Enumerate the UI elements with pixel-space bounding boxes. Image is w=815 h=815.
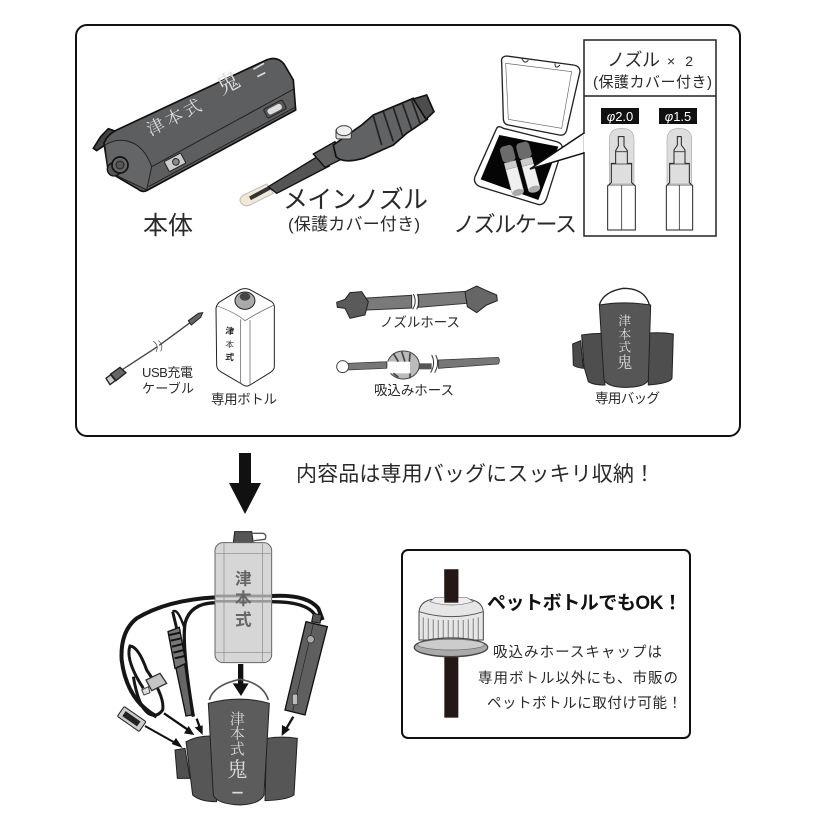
hose cap bbox=[142, 673, 167, 695]
icon: main unit: 津本式 bbox=[142, 90, 208, 140]
bottle: 津 bbox=[235, 570, 252, 589]
icon: suction hose bbox=[337, 351, 499, 379]
text: nozzle quantity: × 2 bbox=[667, 53, 693, 69]
icon: dedicated bag: 本 bbox=[618, 323, 631, 342]
label: main unit: 本体 bbox=[143, 212, 193, 240]
bottle: 本 bbox=[235, 590, 252, 609]
icon: main unit bbox=[93, 58, 296, 191]
label: diameter 2.0: φ2.0 bbox=[607, 109, 633, 124]
bag bbox=[175, 679, 297, 805]
bag: 本 bbox=[230, 723, 245, 744]
bag: 鬼 bbox=[227, 753, 248, 783]
label: nozzle hose: ノズルホース bbox=[380, 315, 460, 330]
icon: dedicated bottle: 式 bbox=[225, 350, 235, 363]
icon: dedicated bag: 津 bbox=[618, 310, 631, 329]
label: main nozzle cover note: (保護カバー付き) bbox=[288, 215, 420, 234]
illustration: items stored in bag bbox=[117, 532, 327, 805]
label: main nozzle: メインノズル bbox=[283, 186, 428, 214]
bottle: 式 bbox=[235, 610, 252, 629]
text: description bbox=[478, 644, 682, 712]
icon: nozzle hose bbox=[337, 286, 497, 318]
icon: dedicated bag: 鬼 bbox=[617, 350, 632, 372]
label: USB cable bbox=[142, 365, 194, 396]
text: description: ペットボトルに取付け可能！ bbox=[487, 695, 682, 712]
bottle bbox=[215, 532, 272, 663]
usb cable case bbox=[117, 706, 146, 732]
icon: dedicated bag bbox=[573, 288, 673, 387]
icon: main unit: 鬼 bbox=[210, 62, 245, 101]
arrows into bag bbox=[145, 664, 293, 743]
label: diameter 1.5: φ1.5 bbox=[665, 109, 691, 124]
icon: dedicated bottle: 津 bbox=[225, 324, 235, 337]
panel: package contents bbox=[76, 25, 740, 436]
icon: dedicated bottle: 本 bbox=[225, 338, 235, 350]
nozzle bbox=[168, 612, 192, 716]
bag: 式 bbox=[230, 738, 245, 759]
icon: suction hose cap bbox=[414, 569, 488, 718]
icon: main nozzle bbox=[240, 95, 434, 206]
icon: nozzle 1.5 bbox=[666, 128, 693, 230]
main unit bbox=[285, 613, 327, 715]
arrow: big down arrow bbox=[229, 453, 261, 514]
label: dedicated bottle: 専用ボトル bbox=[211, 392, 277, 407]
label: USB cable: ケーブル bbox=[142, 381, 194, 396]
text: description: 専用ボトル以外にも、市販の bbox=[478, 670, 678, 687]
text: nozzle quantity: ノズル bbox=[607, 50, 660, 70]
icon: nozzle 2.0 bbox=[608, 128, 635, 230]
text: nozzle quantity bbox=[607, 50, 693, 70]
label: diameter 2.0 bbox=[601, 108, 639, 124]
text: description: 吸込みホースキャップは bbox=[493, 644, 662, 661]
label: nozzle case: ノズルケース bbox=[453, 212, 577, 237]
callout: nozzle detail box bbox=[530, 40, 716, 236]
icon: USB cable bbox=[106, 313, 203, 385]
label: diameter 1.5 bbox=[659, 108, 697, 124]
text: cover note: (保護カバー付き) bbox=[593, 74, 712, 91]
label: suction hose: 吸込みホース bbox=[374, 383, 454, 398]
hoses behind bottle bbox=[122, 597, 215, 717]
icon: dedicated bag: 式 bbox=[618, 337, 631, 356]
label: dedicated bag: 専用バッグ bbox=[595, 391, 660, 406]
heading: PET bottle OK: ペットボトルでもOK！ bbox=[487, 592, 682, 614]
icon: nozzle case bbox=[474, 56, 580, 205]
bag: 津 bbox=[230, 708, 245, 729]
label: USB cable: USB充電 bbox=[142, 365, 193, 380]
icon: dedicated bottle bbox=[216, 289, 274, 386]
panel: PET bottle note bbox=[402, 550, 690, 738]
heading: storage note: 内容品は専用バッグにスッキリ収納！ bbox=[296, 463, 655, 486]
